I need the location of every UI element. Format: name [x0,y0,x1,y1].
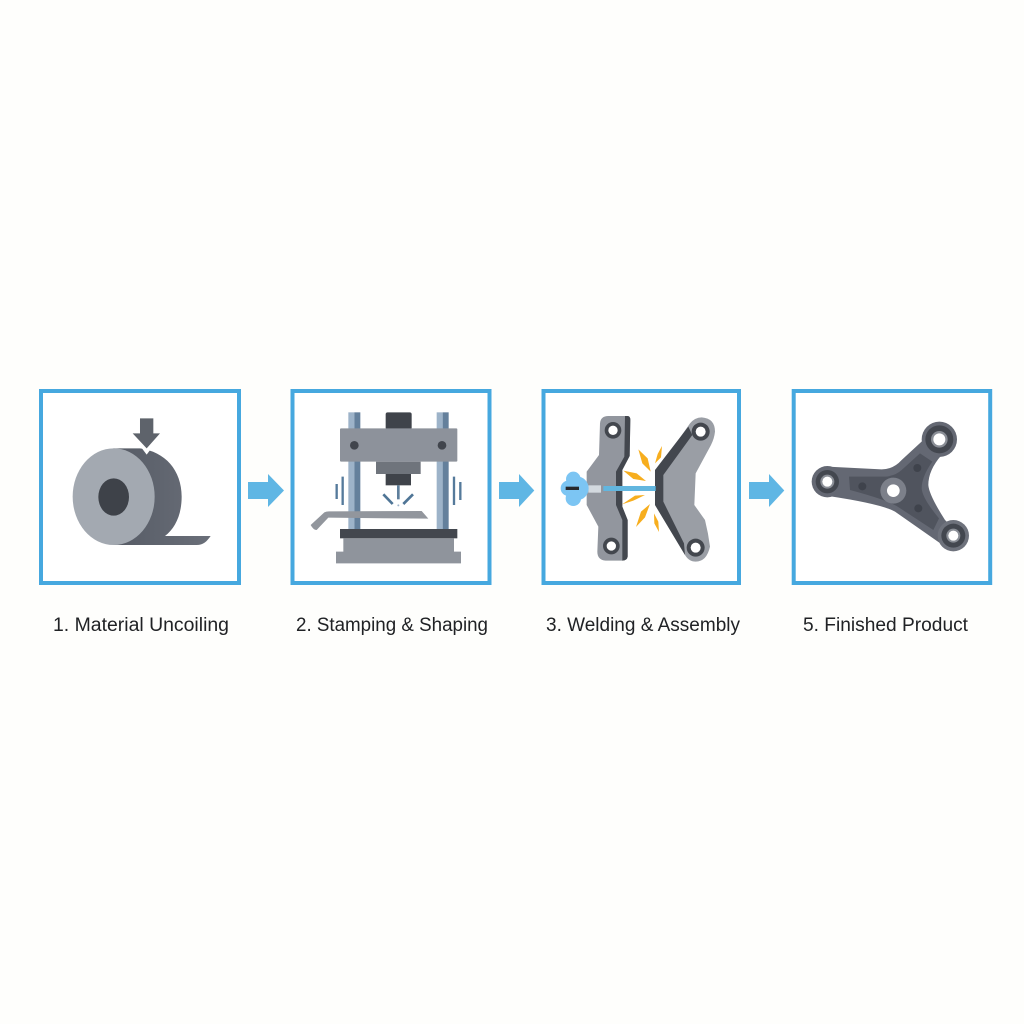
left bracket [587,416,630,561]
icon: finished bracket [812,422,969,551]
icon: stamping press [311,412,461,563]
arrow: step 3 to 5 [749,474,784,507]
weld beam [603,486,656,491]
panel: step 1 material uncoiling [41,391,239,583]
panel: step 2 stamping and shaping [292,391,490,583]
torch flame [561,472,589,506]
sparks [622,446,662,532]
label: step 1: 1. Material Uncoiling [53,615,229,636]
arrow: step 2 to 3 [499,474,534,507]
arrow: step 1 to 2 [248,474,284,507]
label: step 3: 3. Welding & Assembly [546,615,740,636]
icon: welded parts [561,416,715,562]
panel: step 5 finished product [794,391,990,583]
label: step 2: 2. Stamping & Shaping [296,615,488,636]
label: step 5: 5. Finished Product [803,615,969,636]
icon: steel coil [73,418,211,545]
panel: step 3 welding and assembly [544,391,739,583]
right bracket [655,417,715,562]
